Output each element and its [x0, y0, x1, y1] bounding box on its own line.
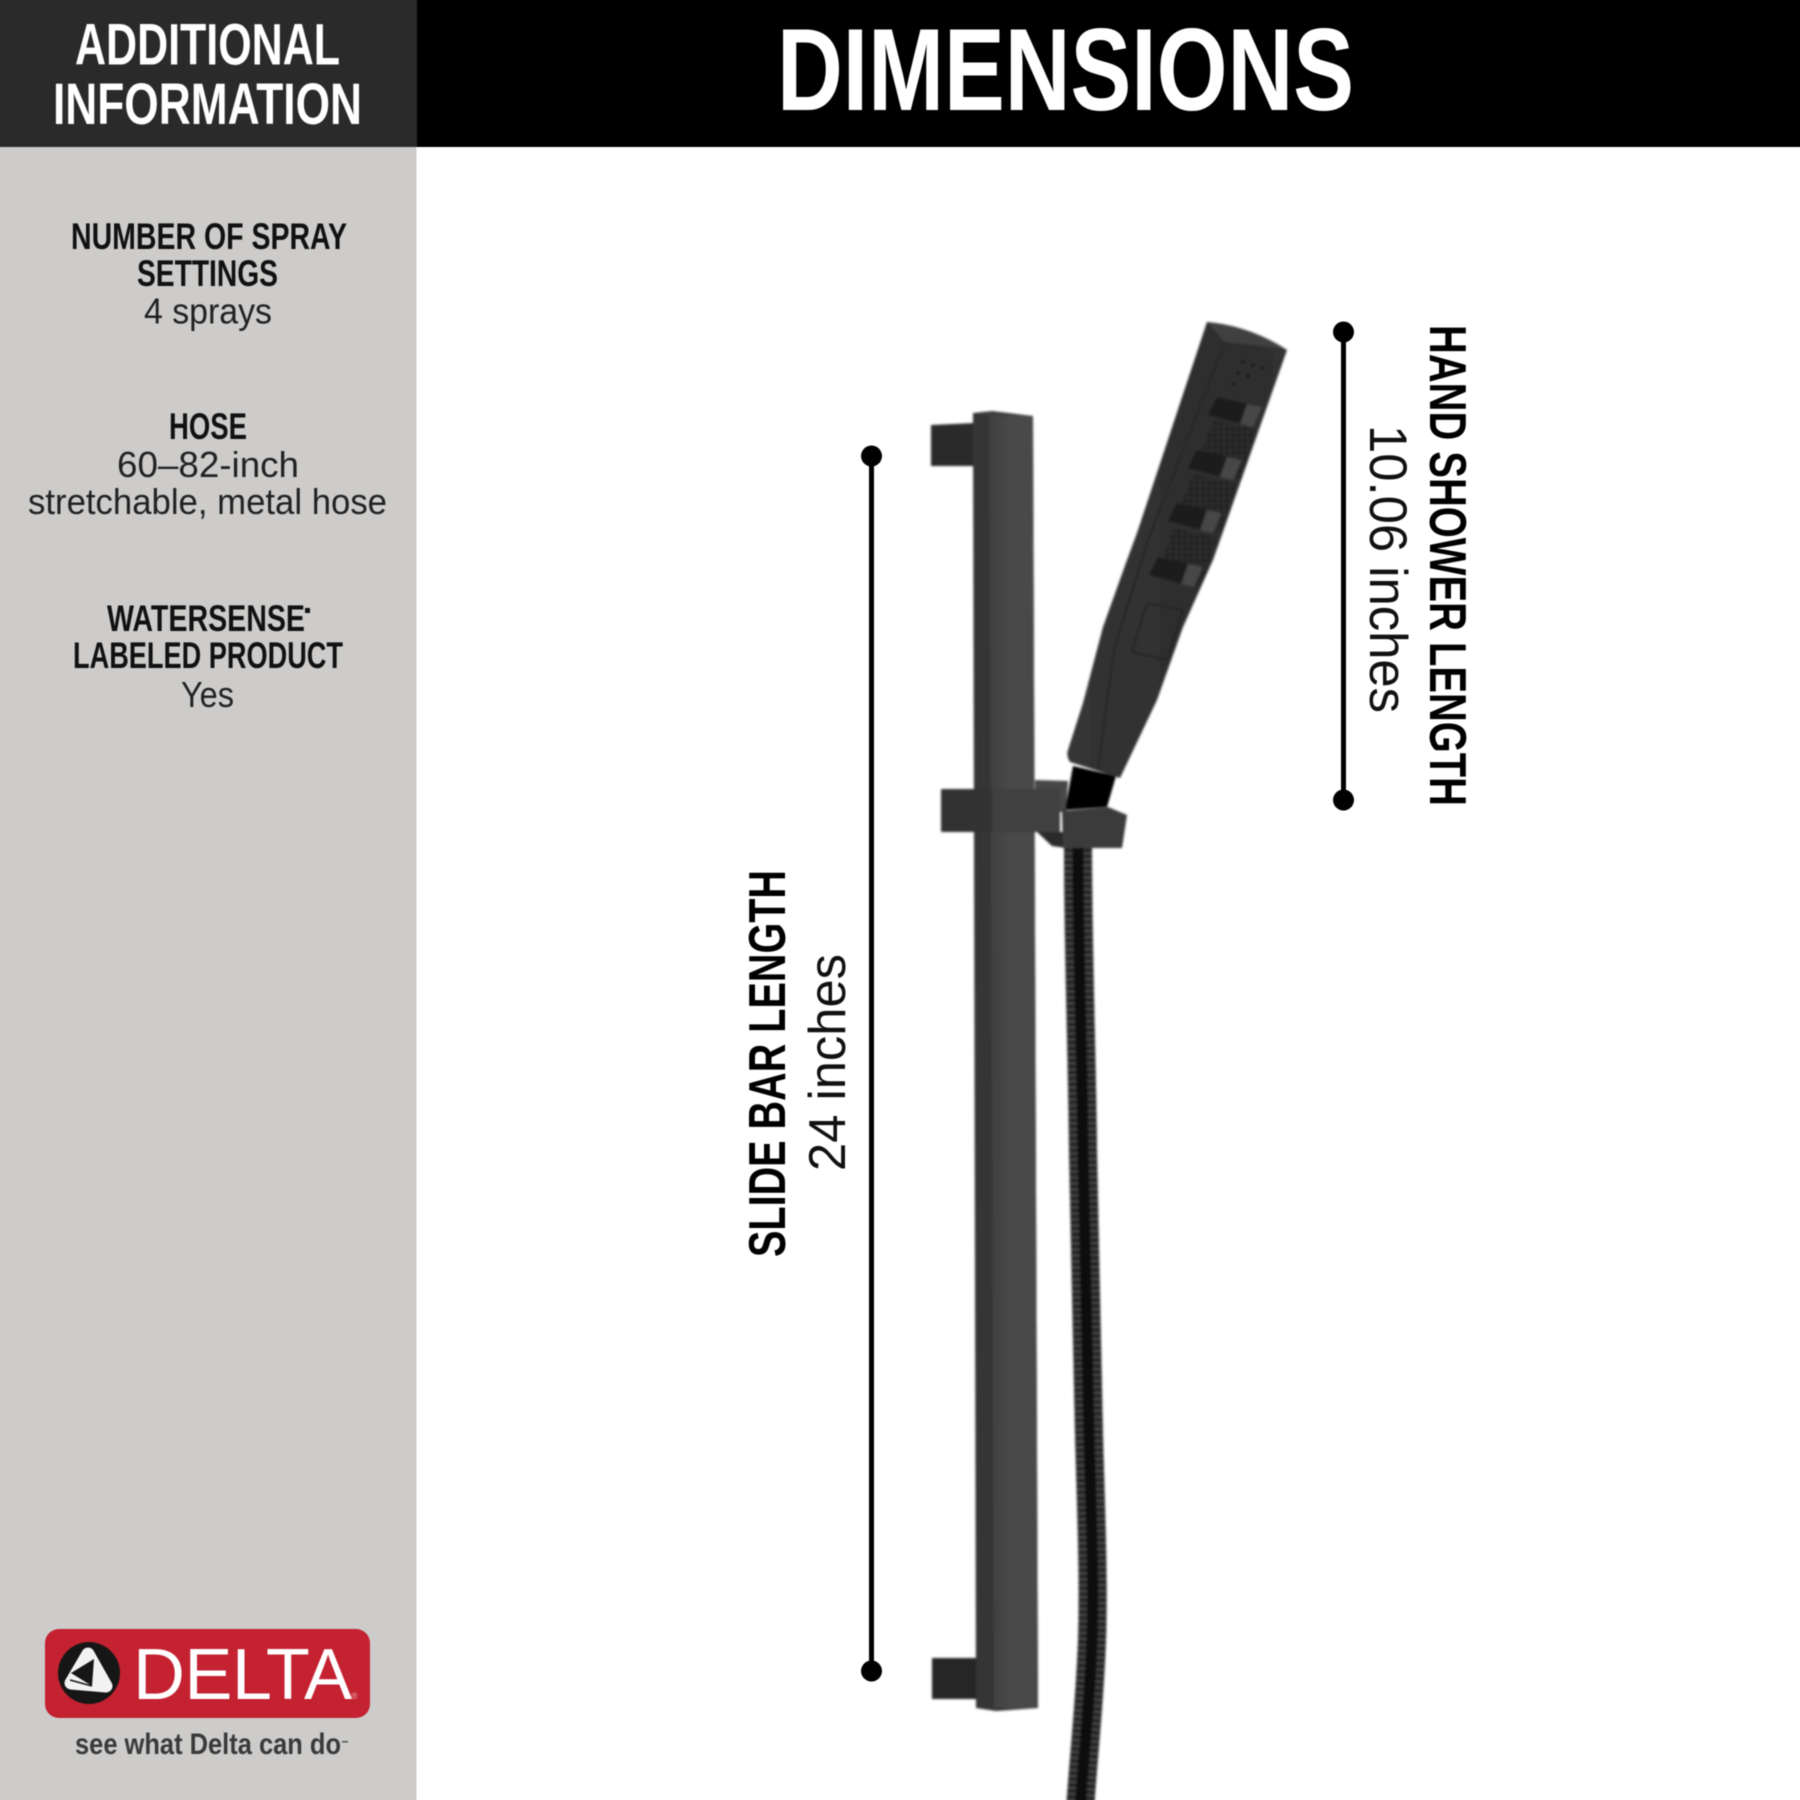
spec: hose: [28, 406, 387, 522]
spec: watersense labeled product: WATERSENSE: [107, 598, 305, 639]
spray selector pads: [1157, 420, 1256, 586]
product: slide bar with hand shower: [931, 322, 1287, 1800]
logo: Delta: [45, 1629, 370, 1718]
measure line: hand shower: [1333, 322, 1354, 810]
sidebar header: ADDITIONAL: [75, 12, 340, 78]
hand shower holder: [1062, 807, 1127, 848]
title banner: DIMENSIONS: [777, 4, 1354, 135]
spec: hose: stretchable, metal hose: [28, 481, 387, 522]
spec: number of spray settings: NUMBER OF SPRAY: [71, 216, 347, 257]
slider block: [941, 780, 1068, 848]
spec: hose: 60–82-inch: [117, 444, 299, 485]
spec: hose: HOSE: [169, 406, 247, 447]
measure line: slide bar: [861, 446, 882, 1682]
panel: additional information sidebar: [0, 0, 417, 1800]
dimension: hand shower length: HAND SHOWER LENGTH: [1418, 325, 1476, 806]
spray selector recesses: [1149, 397, 1262, 587]
spec: watersense labeled product: LABELED PRODUCT: [73, 635, 343, 676]
sidebar header: [0, 0, 417, 147]
logo: Delta: ®: [351, 1691, 358, 1701]
dimension: slide bar length: SLIDE BAR LENGTH: [739, 870, 797, 1257]
tagline: see what Delta can do: [75, 1728, 341, 1761]
hose: [1078, 846, 1093, 1800]
bottom wall bracket: [932, 1658, 978, 1699]
sidebar header: INFORMATION: [53, 72, 362, 137]
logo: Delta: DELTA: [133, 1635, 352, 1715]
spec: watersense labeled product: [73, 598, 343, 715]
icon: Delta triangle mark: [58, 1642, 120, 1704]
dimension: hand shower length: 10.06 inches: [1358, 425, 1417, 713]
spec: number of spray settings: SETTINGS: [137, 253, 278, 294]
top wall bracket: [931, 423, 975, 466]
spec: number of spray settings: 4 sprays: [144, 290, 272, 332]
spec: watersense labeled product: Yes: [181, 674, 234, 715]
handle panel outline: [1132, 603, 1183, 660]
dimension: hand shower length: [1333, 322, 1476, 810]
holder neck: [1065, 766, 1116, 810]
nozzle dots: [1232, 360, 1265, 386]
hand shower: [1067, 322, 1287, 778]
spec: number of spray settings: [71, 216, 347, 332]
dimension: slide bar length: [739, 446, 882, 1682]
dimension: slide bar length: 24 inches: [799, 954, 857, 1171]
title banner: [417, 0, 1800, 147]
slide bar: [973, 411, 1038, 1711]
